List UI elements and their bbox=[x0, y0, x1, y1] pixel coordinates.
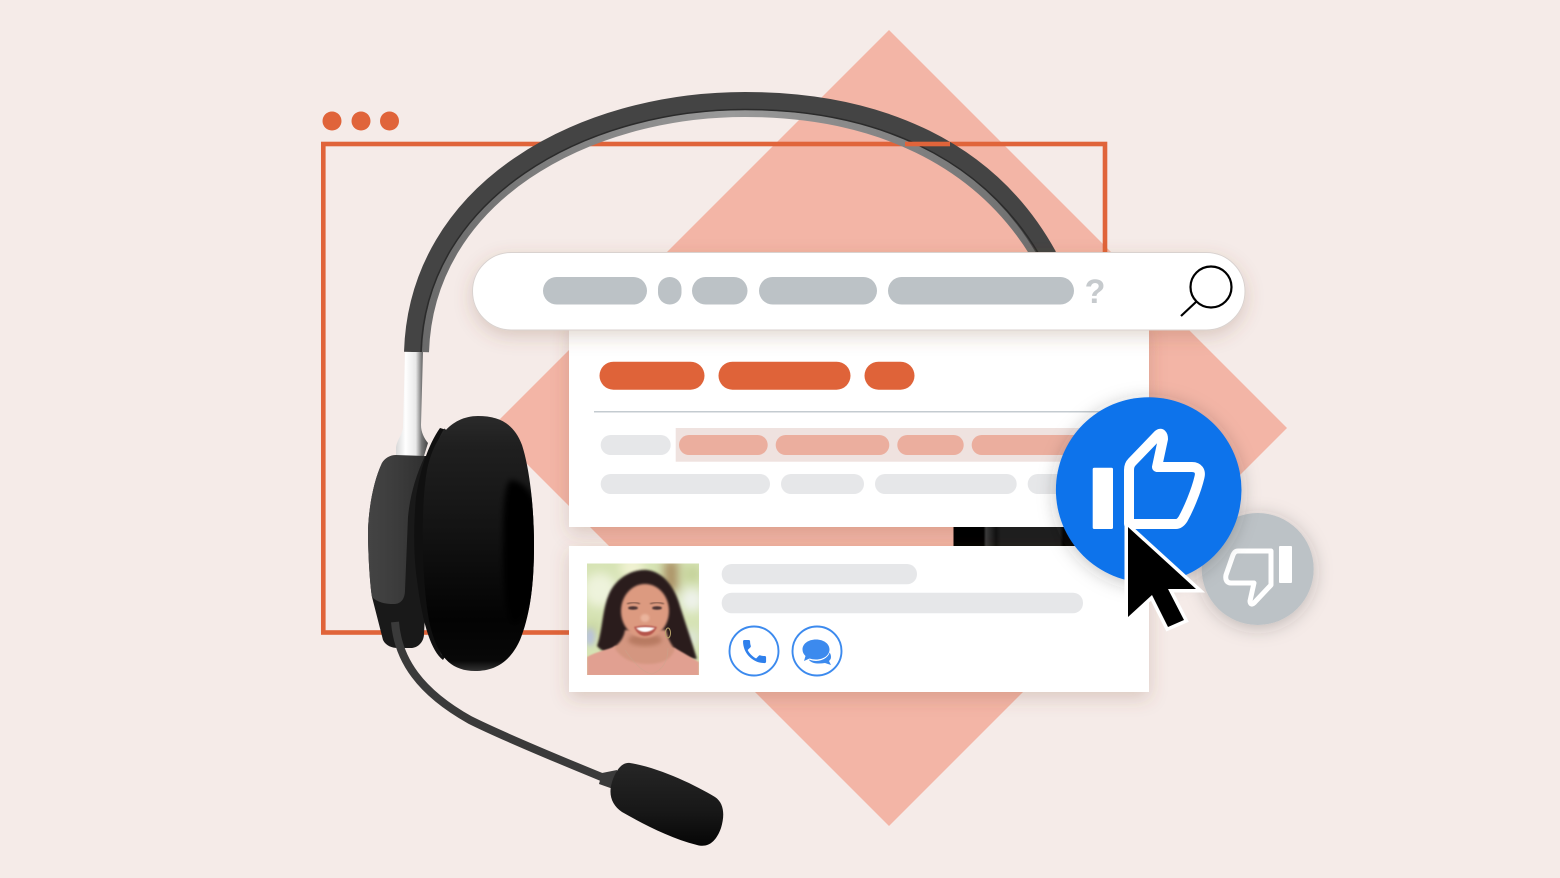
headset headband bbox=[413, 101, 1048, 352]
neck and chest bbox=[614, 630, 675, 664]
microphone boom bbox=[395, 622, 723, 846]
icon: phone bbox=[730, 626, 778, 676]
earring bbox=[666, 628, 670, 638]
thumbs up button bbox=[1056, 397, 1241, 583]
question mark: ? bbox=[1085, 273, 1105, 311]
name pills bbox=[722, 564, 1083, 613]
cushion back ring bbox=[414, 428, 480, 660]
mic capsule bbox=[610, 763, 723, 846]
salmon diamond bbox=[491, 30, 1287, 826]
cushion bbox=[423, 416, 534, 671]
black strip between cards bbox=[954, 527, 1078, 546]
search bar bbox=[472, 252, 1245, 330]
metal stem bbox=[396, 352, 428, 456]
agent portrait bbox=[587, 564, 699, 675]
search result card bbox=[569, 320, 1149, 527]
browser window frame bbox=[322, 112, 1105, 632]
headset earcup and stem bbox=[368, 352, 540, 671]
housing panel bbox=[368, 455, 425, 604]
cursor arrow bbox=[1128, 527, 1196, 627]
icon: magnifying glass bbox=[1181, 266, 1232, 316]
thumbs down button bbox=[1202, 513, 1314, 625]
smile bbox=[634, 626, 657, 636]
chin shadow bbox=[628, 634, 662, 646]
housing lower bbox=[368, 456, 432, 648]
gray snippet pills bbox=[601, 435, 1088, 494]
query pills bbox=[543, 277, 1074, 304]
orange title pills bbox=[600, 362, 914, 390]
cushion inner hole bbox=[502, 480, 534, 615]
boom connector bbox=[599, 770, 617, 790]
face bbox=[621, 584, 669, 638]
agent contact card bbox=[569, 546, 1149, 692]
highlighted snippet row bbox=[676, 428, 1090, 462]
hair bbox=[597, 570, 697, 659]
icon: chat bubbles bbox=[792, 626, 842, 676]
shirt bbox=[587, 646, 699, 676]
